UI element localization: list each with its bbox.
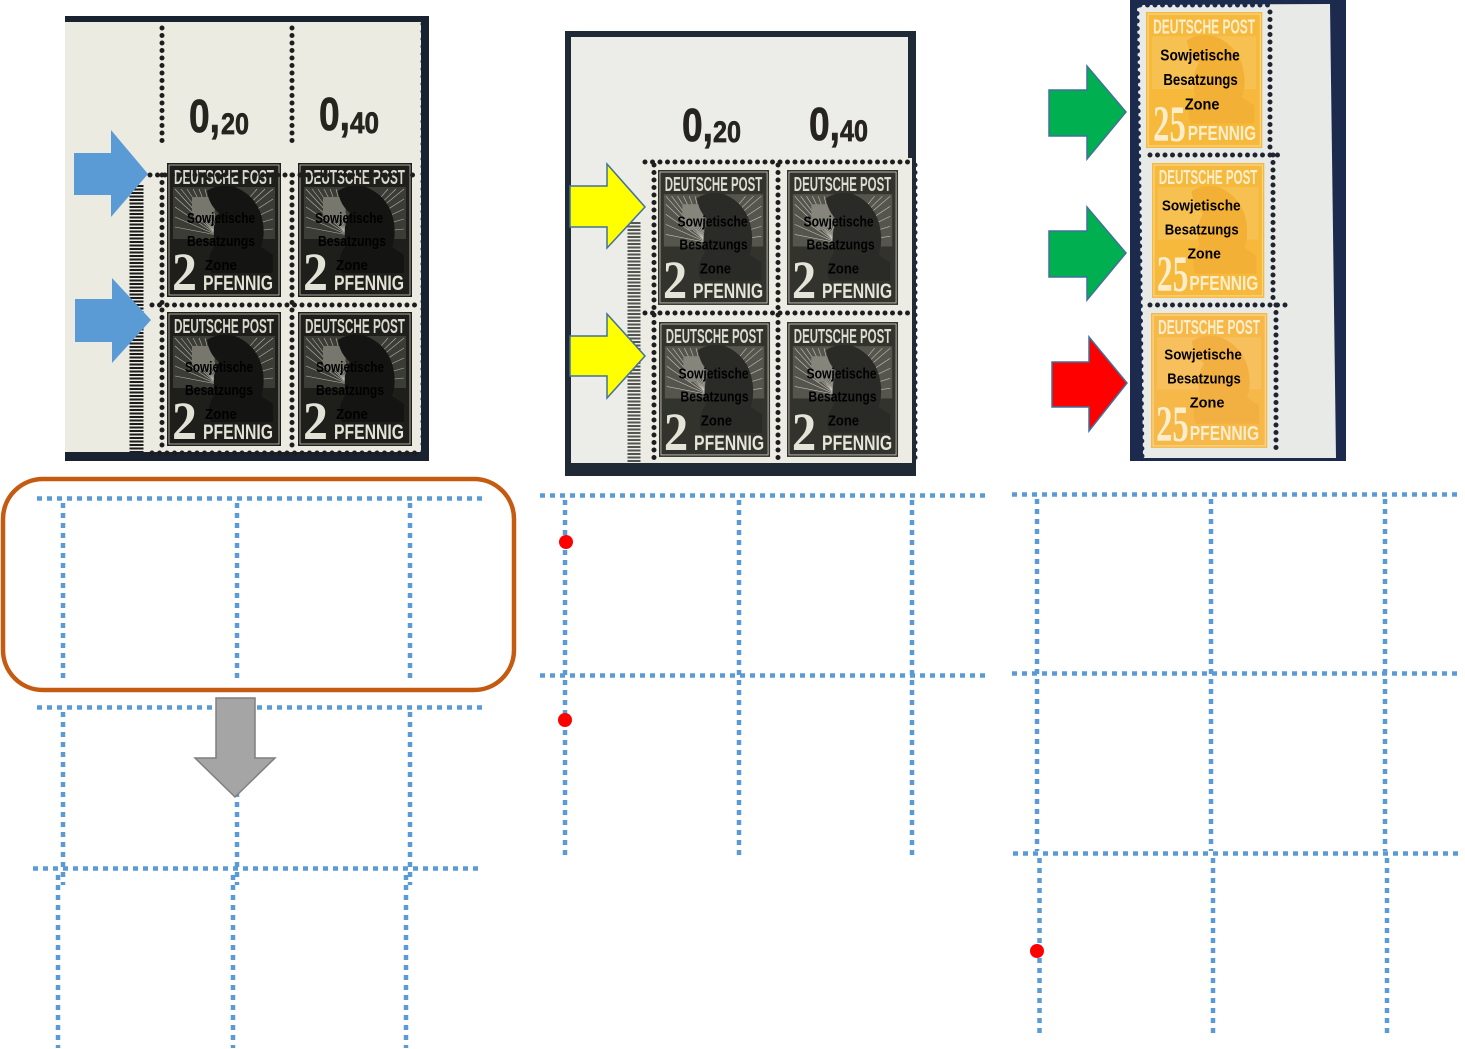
marker: red dot, right grid bbox=[1030, 944, 1044, 958]
stamp: bottom left: PFENNIG bbox=[694, 432, 764, 455]
stamp: top left: PFENNIG bbox=[693, 280, 763, 303]
stamp: bottom left: PFENNIG bbox=[203, 421, 273, 444]
stamp: top right: Sowjetische bbox=[315, 210, 383, 227]
stamp: middle: DEUTSCHE POST bbox=[1159, 167, 1257, 189]
stamp: top left: Sowjetische bbox=[187, 210, 255, 227]
grid highlight: rounded orange frame bbox=[3, 479, 514, 690]
stamp: middle: Zone bbox=[1187, 246, 1221, 263]
stamp: top left: Zone bbox=[205, 257, 237, 274]
marker: red dot upper, centre grid bbox=[559, 535, 573, 549]
margin value 0,20 bbox=[189, 90, 249, 142]
margin value 0,20: 0, bbox=[682, 99, 713, 151]
stamp: bottom right: Zone bbox=[828, 414, 859, 430]
stamp: top right: Besatzungs bbox=[806, 237, 875, 254]
stamp: bottom: 25 bbox=[1156, 396, 1189, 452]
stamp: bottom right: PFENNIG bbox=[822, 432, 892, 455]
stamp: bottom bbox=[1151, 313, 1267, 452]
stamp: bottom: DEUTSCHE POST bbox=[1158, 317, 1261, 339]
stamp: top right: Zone bbox=[336, 257, 368, 274]
arrow: red bbox=[1052, 337, 1127, 431]
stamp: bottom left: Besatzungs bbox=[185, 382, 253, 399]
margin value 0,40: 0, bbox=[809, 98, 840, 150]
stamp: top left bbox=[167, 163, 281, 302]
perforations: left block bbox=[150, 28, 420, 453]
stamp: top: DEUTSCHE POST bbox=[1153, 16, 1255, 38]
stamp: top: PFENNIG bbox=[1188, 123, 1256, 145]
panel: orange 25 Pfennig strip, right bbox=[1130, 0, 1346, 461]
stamp: top right: 2 bbox=[303, 242, 328, 302]
margin value 0,20 bbox=[682, 99, 741, 151]
arrow: blue upper bbox=[74, 130, 148, 217]
stamp: top: 25 bbox=[1153, 97, 1186, 153]
stamp: bottom right bbox=[298, 312, 412, 451]
stamp: bottom: PFENNIG bbox=[1190, 423, 1259, 445]
stamp: bottom right: Besatzungs bbox=[316, 382, 384, 399]
stamp: bottom right: Sowjetische bbox=[316, 359, 384, 376]
stamp: middle: Sowjetische bbox=[1162, 197, 1241, 214]
perforation grid: right bbox=[1012, 494, 1459, 1033]
stamp: top right: DEUTSCHE POST bbox=[794, 174, 891, 196]
stamp: bottom left: DEUTSCHE POST bbox=[174, 316, 274, 338]
stamp: top left: DEUTSCHE POST bbox=[665, 174, 762, 196]
perforations: right strip bbox=[1150, 12, 1286, 448]
arrow: grey down bbox=[195, 698, 275, 797]
stamp: top right: Zone bbox=[828, 262, 859, 278]
stamp: top right: Sowjetische bbox=[804, 214, 874, 230]
margin value 0,20: 20 bbox=[713, 116, 741, 149]
stamp: bottom left bbox=[167, 312, 281, 451]
stamp: top right: 2 bbox=[792, 249, 816, 310]
margin value 0,40: 0, bbox=[319, 88, 350, 140]
panel: grey 2 Pfennig block, centre bbox=[565, 31, 916, 476]
stamp: top right: DEUTSCHE POST bbox=[305, 167, 405, 189]
stamp: top right bbox=[787, 170, 898, 310]
stamp: bottom left: Sowjetische bbox=[185, 359, 253, 376]
stamp: top right bbox=[298, 163, 412, 302]
margin value 0,40: 40 bbox=[350, 107, 379, 140]
stamp: top left: Besatzungs bbox=[679, 237, 748, 254]
stamp: top left: Besatzungs bbox=[187, 233, 255, 250]
stamp: bottom left: Zone bbox=[701, 414, 732, 430]
stamp: bottom right: Zone bbox=[336, 406, 368, 423]
stamp: bottom right: Sowjetische bbox=[806, 366, 877, 382]
stamp: top left: Sowjetische bbox=[677, 214, 748, 230]
stamp: bottom: Sowjetische bbox=[1164, 346, 1242, 363]
stamp: bottom right: Besatzungs bbox=[808, 389, 877, 406]
arrow: blue lower bbox=[75, 278, 151, 363]
margin value 0,40 bbox=[809, 98, 868, 150]
stamp: top right: Besatzungs bbox=[318, 233, 386, 250]
margin value 0,20: 0, bbox=[189, 90, 220, 142]
stamp: top right: PFENNIG bbox=[822, 280, 892, 303]
perforations: centre block bbox=[645, 162, 912, 460]
stamp: bottom left: Sowjetische bbox=[678, 366, 749, 382]
stamp: top left: PFENNIG bbox=[203, 272, 273, 295]
stamp: bottom right: DEUTSCHE POST bbox=[305, 316, 405, 338]
stamp: top bbox=[1146, 12, 1262, 153]
margin value 0,40 bbox=[319, 88, 379, 140]
stamp: bottom left: Besatzungs bbox=[680, 389, 749, 406]
stamp: top right: PFENNIG bbox=[334, 272, 404, 295]
arrow: green upper bbox=[1049, 66, 1126, 159]
stamp: bottom left: 2 bbox=[664, 401, 688, 462]
arrow: yellow upper bbox=[570, 164, 645, 248]
stamp: top left: DEUTSCHE POST bbox=[174, 167, 274, 189]
stamp: bottom: Zone bbox=[1190, 395, 1224, 412]
stamp: top: Sowjetische bbox=[1160, 48, 1240, 65]
stamp: middle: Besatzungs bbox=[1165, 221, 1239, 239]
stamp: top left: Zone bbox=[700, 262, 731, 278]
marker: red dot lower, centre grid bbox=[558, 713, 572, 727]
margin value 0,40: 40 bbox=[840, 115, 868, 148]
perforation grid: left bbox=[33, 498, 482, 1048]
panel: black 2 Pfennig block, left bbox=[65, 16, 429, 461]
stamp: middle: 25 bbox=[1157, 246, 1188, 302]
stamp: top left bbox=[658, 170, 769, 310]
stamp: top: Besatzungs bbox=[1163, 72, 1238, 89]
stamp: top left: 2 bbox=[663, 249, 687, 310]
stamp: bottom right: 2 bbox=[792, 401, 816, 462]
stamp: bottom: Besatzungs bbox=[1167, 371, 1241, 387]
stamp: bottom left: DEUTSCHE POST bbox=[666, 326, 763, 348]
stamp: top: Zone bbox=[1185, 96, 1219, 113]
margin value 0,20: 20 bbox=[221, 108, 249, 141]
stamp: middle bbox=[1152, 163, 1264, 302]
stamp: middle: PFENNIG bbox=[1189, 273, 1258, 295]
perforation grid: centre bbox=[540, 496, 985, 855]
stamp: bottom right: PFENNIG bbox=[334, 421, 404, 444]
arrow: green lower bbox=[1049, 207, 1126, 300]
stamp: bottom left bbox=[659, 322, 770, 462]
stamp: bottom right: 2 bbox=[303, 391, 328, 451]
stamp: bottom left: Zone bbox=[205, 406, 237, 423]
stamp: bottom left: 2 bbox=[172, 391, 197, 451]
stamp: bottom right bbox=[787, 322, 898, 462]
stamp: bottom right: DEUTSCHE POST bbox=[794, 326, 891, 348]
arrow: yellow lower bbox=[570, 314, 645, 398]
stamp: top left: 2 bbox=[172, 242, 197, 302]
